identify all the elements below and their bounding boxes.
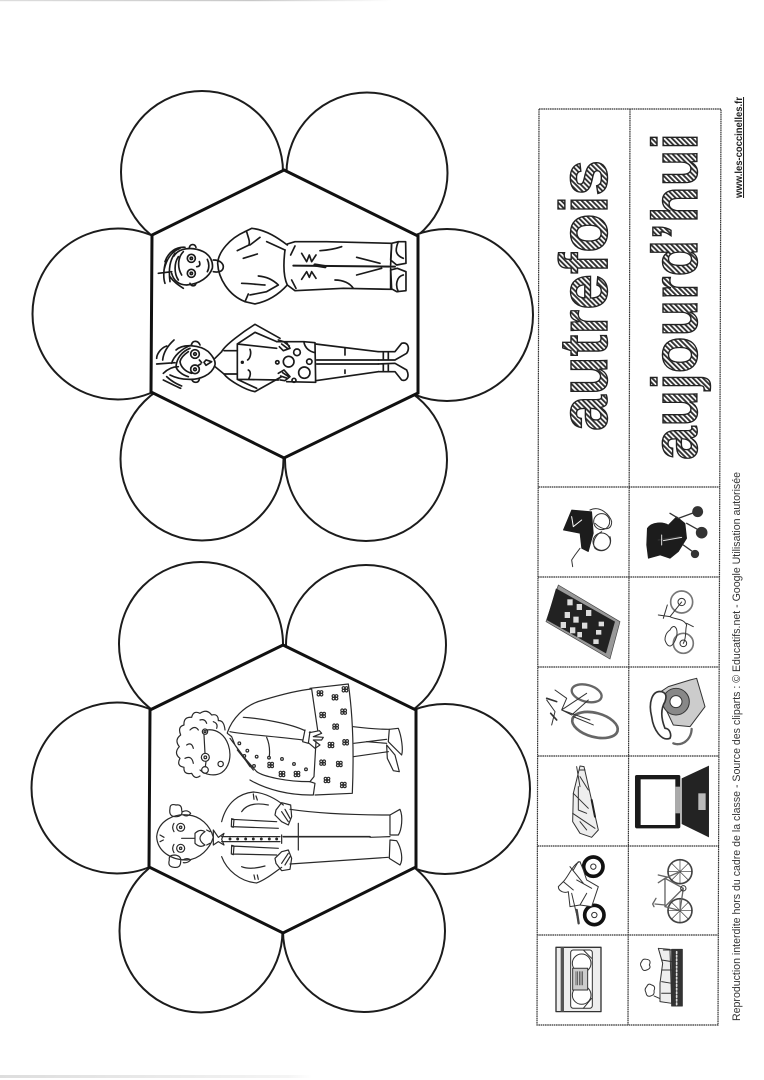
cut-out strip table — [537, 109, 721, 1025]
petal right — [361, 229, 533, 401]
central hexagon — [151, 170, 418, 458]
flower: children (today) — [32, 91, 533, 541]
petal left — [32, 702, 202, 874]
icon: road bicycle — [547, 681, 621, 743]
petal upper left — [121, 91, 283, 253]
petal lower right — [283, 850, 445, 1012]
central hexagon — [149, 645, 416, 933]
petal lower left — [120, 850, 282, 1012]
credit: reproduction notice: Reproduction interdite hors du cadre de la classe - Source des cliparts : © Educatifs.net - Google Utilisation autorisée — [731, 472, 743, 1021]
icon: modern stroller — [647, 507, 707, 558]
illustration: girl — [157, 324, 408, 392]
label: aujourd'hui: aujourd’hui — [639, 133, 711, 460]
icon: high-speed train — [573, 766, 598, 837]
petal upper left — [119, 562, 283, 726]
illustration: grandmother — [176, 684, 402, 795]
illustration: boy — [158, 228, 406, 304]
strip outer border and grid — [537, 109, 721, 1025]
credit: website: www.les-coccinelles.fr — [733, 97, 745, 199]
petal lower right — [285, 379, 447, 541]
icon: rotary telephone — [650, 678, 705, 744]
icon: smartphone — [546, 585, 620, 659]
illustration: grandfather — [157, 792, 402, 883]
icon: steam train — [640, 948, 682, 1006]
icon: sport motorbike — [558, 857, 604, 925]
petal left — [32, 228, 204, 400]
petal upper right — [286, 92, 448, 254]
label: autrefois: autrefois — [546, 160, 622, 431]
icon: VHS cassette — [556, 947, 601, 1012]
petal upper right — [286, 565, 446, 725]
icon: old pram — [563, 509, 612, 567]
petal lower left — [120, 378, 284, 540]
icon: motorcycle outline — [658, 591, 693, 653]
petal right — [360, 704, 530, 874]
icon: laptop — [635, 766, 709, 837]
icon: city bicycle — [653, 860, 692, 923]
flower: grandparents (long ago) — [32, 562, 530, 1012]
